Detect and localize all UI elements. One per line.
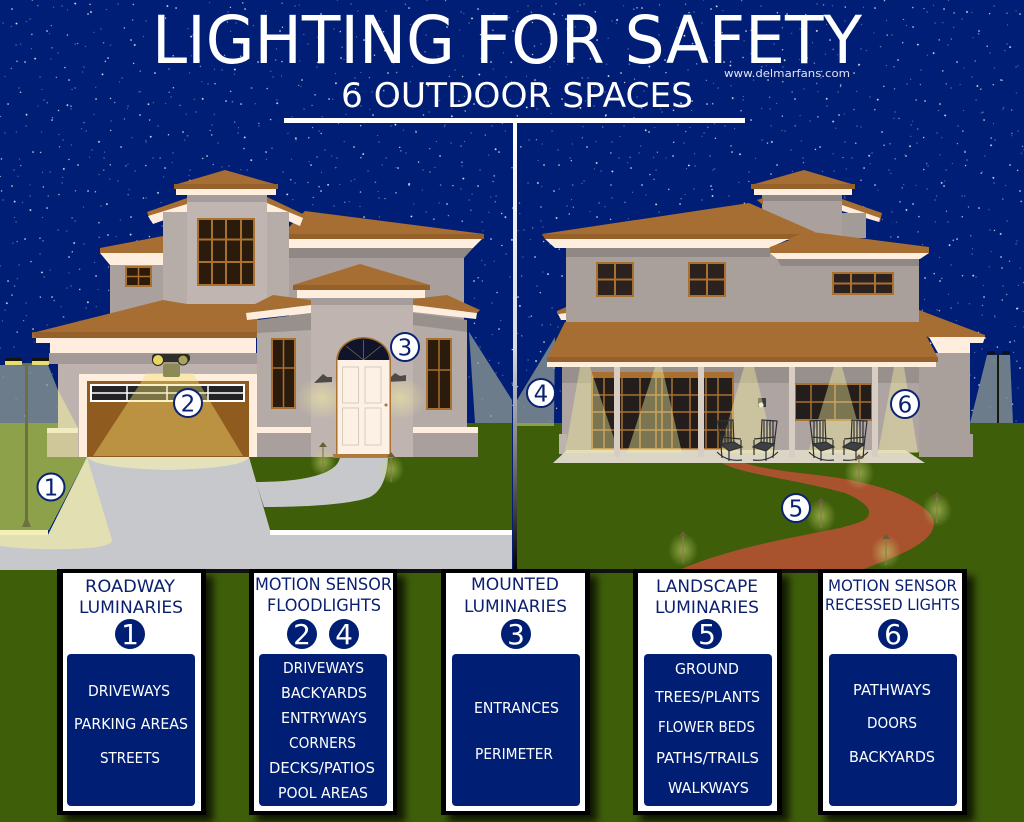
number badge: 5 [698,618,716,651]
number badge [501,618,531,651]
rocking chairs [717,420,868,461]
heading [825,576,960,614]
brick pathway [679,463,934,570]
list: BACKYARDS [281,684,367,702]
heading: FLOODLIGHTS [267,596,381,616]
heading: LUMINARIES [655,598,759,618]
heading [464,575,567,617]
icon: street lamp [5,358,49,527]
panel: landscape luminaries [633,569,789,822]
heading: MOUNTED [471,575,559,595]
porch roof [547,322,938,367]
panel: front of house scene [0,170,512,570]
title: LIGHTING FOR SAFETY [152,2,863,79]
landscape path lights [310,442,404,484]
house: upper storey [542,198,929,324]
list: DRIVEWAYS [88,682,170,700]
list: ENTRANCES [474,699,559,717]
marker 1: 1 [44,476,58,502]
landscape path lights [668,454,952,569]
front door [333,337,393,458]
list [259,654,387,806]
list: CORNERS [289,734,356,752]
house: back upper wing [100,211,484,329]
title underline [284,118,745,123]
number badges: 4 [335,618,353,651]
list [829,654,957,806]
list: PATHWAYS [853,681,931,699]
road and driveway [0,457,512,570]
marker 2 [174,389,202,418]
marker 6 [891,390,919,418]
icon: motion sensor floodlight [152,354,190,377]
list: BACKYARDS [849,748,935,766]
heading [255,575,392,616]
marker 3: 3 [398,336,412,362]
card connector bar [57,569,967,573]
house: garage section [32,300,258,457]
list: WALKWAYS [668,779,749,797]
panel: roadway luminaries [57,569,213,822]
number badge [878,618,908,651]
marker 1 [38,474,64,502]
list: FLOWER BEDS [658,718,755,736]
heading [655,577,759,618]
numbered markers on scenes [38,333,919,522]
heading: MOTION SENSOR [255,575,392,595]
back lawn [517,423,1024,570]
porch floor [553,450,925,463]
porch columns [614,367,878,457]
list: DECKS/PATIOS [269,759,375,777]
front lawn [0,423,512,533]
list: GROUND [675,660,739,678]
marker 4: 4 [534,382,548,408]
marker 3 [391,333,419,362]
center divider line [513,122,517,570]
panel: motion sensor recessed lights [818,569,974,822]
heading: LUMINARIES [79,598,183,618]
heading: MOTION SENSOR [828,576,957,595]
marker 5 [782,494,810,522]
list [452,654,580,806]
recessed light beams [565,367,918,453]
number badge: 6 [884,618,902,651]
marker 2: 2 [181,392,195,418]
heading: LANDSCAPE [656,577,758,597]
list: PATHS/TRAILS [656,749,759,767]
house: central tower [147,170,305,305]
side light cones on sky [517,337,1013,423]
icon: street lamp far right [987,351,1010,423]
list: POOL AREAS [278,784,368,802]
number badges: 2 [293,618,311,651]
list: ENTRYWAYS [281,709,367,727]
night sky background [0,0,1024,570]
list: STREETS [100,749,160,767]
subtitle: 6 OUTDOOR SPACES [341,76,693,116]
panel: mounted luminaries [441,569,597,822]
list [644,654,772,806]
heading [79,577,183,618]
heading: RECESSED LIGHTS [825,595,960,614]
number badge: 3 [507,618,525,651]
icon: wall sconces with glow [295,373,427,420]
house: right rear wing [557,307,985,457]
house: upper tower [751,170,882,240]
list: PARKING AREAS [74,715,188,733]
list: TREES/PLANTS [654,688,760,706]
number badge: 1 [121,618,139,651]
panel: back of house scene [517,170,1024,570]
panel: motion sensor floodlights [249,569,405,822]
number badge [692,618,722,651]
marker 4 [527,379,555,408]
marker 5: 5 [789,496,803,522]
list: PERIMETER [475,745,553,763]
website credit: www.delmarfans.com [724,67,850,80]
list: DRIVEWAYS [283,659,364,677]
bottom ground strip [0,570,1024,822]
house: front entrance section [243,264,480,457]
marker 6: 6 [898,392,912,418]
garage floodlight beam [87,373,249,470]
number badges [287,618,359,651]
list: DOORS [867,714,917,732]
heading: LUMINARIES [464,597,567,617]
heading: ROADWAY [85,577,176,597]
number badge [115,618,145,651]
house: porch wall and doors [559,367,919,454]
list [67,654,195,806]
street light glow on sky [0,332,512,423]
